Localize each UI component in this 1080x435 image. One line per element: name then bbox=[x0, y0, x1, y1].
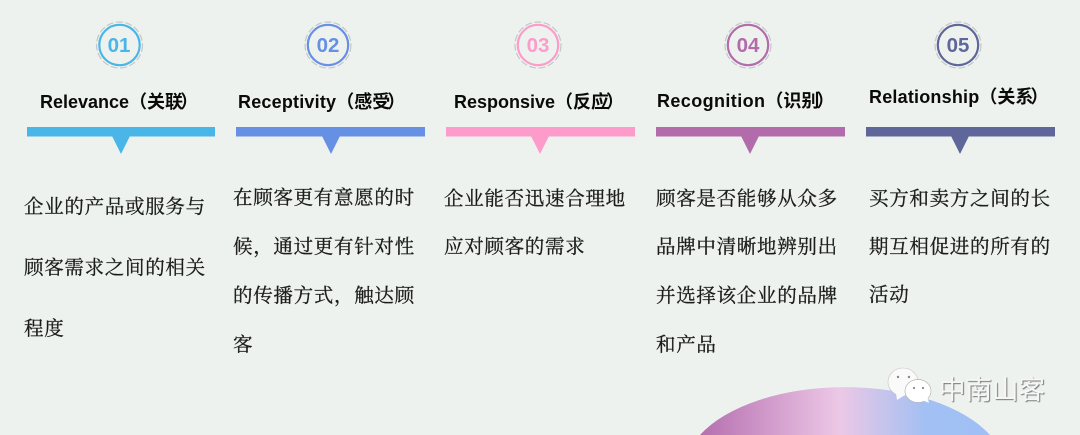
step 2 description: 在顾客更有意愿的时 bbox=[233, 182, 415, 210]
step 2 heading: Receptivity（感受） bbox=[238, 92, 405, 112]
icon: wechat logo bbox=[888, 368, 932, 403]
step 2 graphic bbox=[236, 21, 425, 154]
step 4 graphic bbox=[656, 21, 845, 154]
step 1 graphic: 01 bbox=[108, 34, 130, 57]
step 3 description: 应对顾客的需求 bbox=[444, 231, 585, 259]
step 1 description bbox=[24, 191, 206, 341]
step 5 heading: Relationship（关系） bbox=[869, 87, 1048, 107]
step 3 description: 企业能否迅速合理地 bbox=[444, 183, 626, 211]
step 3 graphic bbox=[446, 21, 635, 154]
step 1 heading: Relevance（关联） bbox=[40, 92, 198, 112]
step 5 graphic: 05 bbox=[947, 34, 969, 57]
step 4 heading: Recognition（识别） bbox=[657, 91, 834, 111]
step 3 description bbox=[444, 183, 626, 259]
step 3 heading: Responsive（反应） bbox=[454, 92, 624, 112]
step 4 description: 品牌中清晰地辨别出 bbox=[656, 231, 838, 259]
step 4 description: 和产品 bbox=[656, 329, 717, 357]
step 2 graphic: 02 bbox=[317, 34, 339, 57]
step 1 description: 程度 bbox=[24, 313, 64, 341]
watermark text: 中南山客 bbox=[939, 368, 1045, 407]
step 5 description: 期互相促进的所有的 bbox=[869, 231, 1051, 259]
step 4 graphic: 04 bbox=[737, 34, 760, 57]
step 1 graphic bbox=[27, 21, 215, 154]
step 1 description: 企业的产品或服务与 bbox=[24, 191, 206, 219]
step 5 graphic bbox=[866, 21, 1055, 154]
step 2 description: 客 bbox=[233, 329, 253, 357]
step 5 description: 买方和卖方之间的长 bbox=[869, 183, 1051, 211]
step 2 description: 的传播方式，触达顾 bbox=[233, 280, 415, 308]
step 4 description: 并选择该企业的品牌 bbox=[656, 280, 838, 308]
step 2 description bbox=[233, 182, 415, 357]
step 3 graphic: 03 bbox=[527, 34, 549, 57]
step 5 description bbox=[869, 183, 1051, 307]
step 4 description bbox=[656, 183, 838, 357]
step 1 description: 顾客需求之间的相关 bbox=[24, 252, 206, 280]
step 2 description: 候，通过更有针对性 bbox=[233, 231, 415, 259]
step 4 description: 顾客是否能够从众多 bbox=[656, 183, 838, 211]
step 5 description: 活动 bbox=[869, 279, 909, 307]
